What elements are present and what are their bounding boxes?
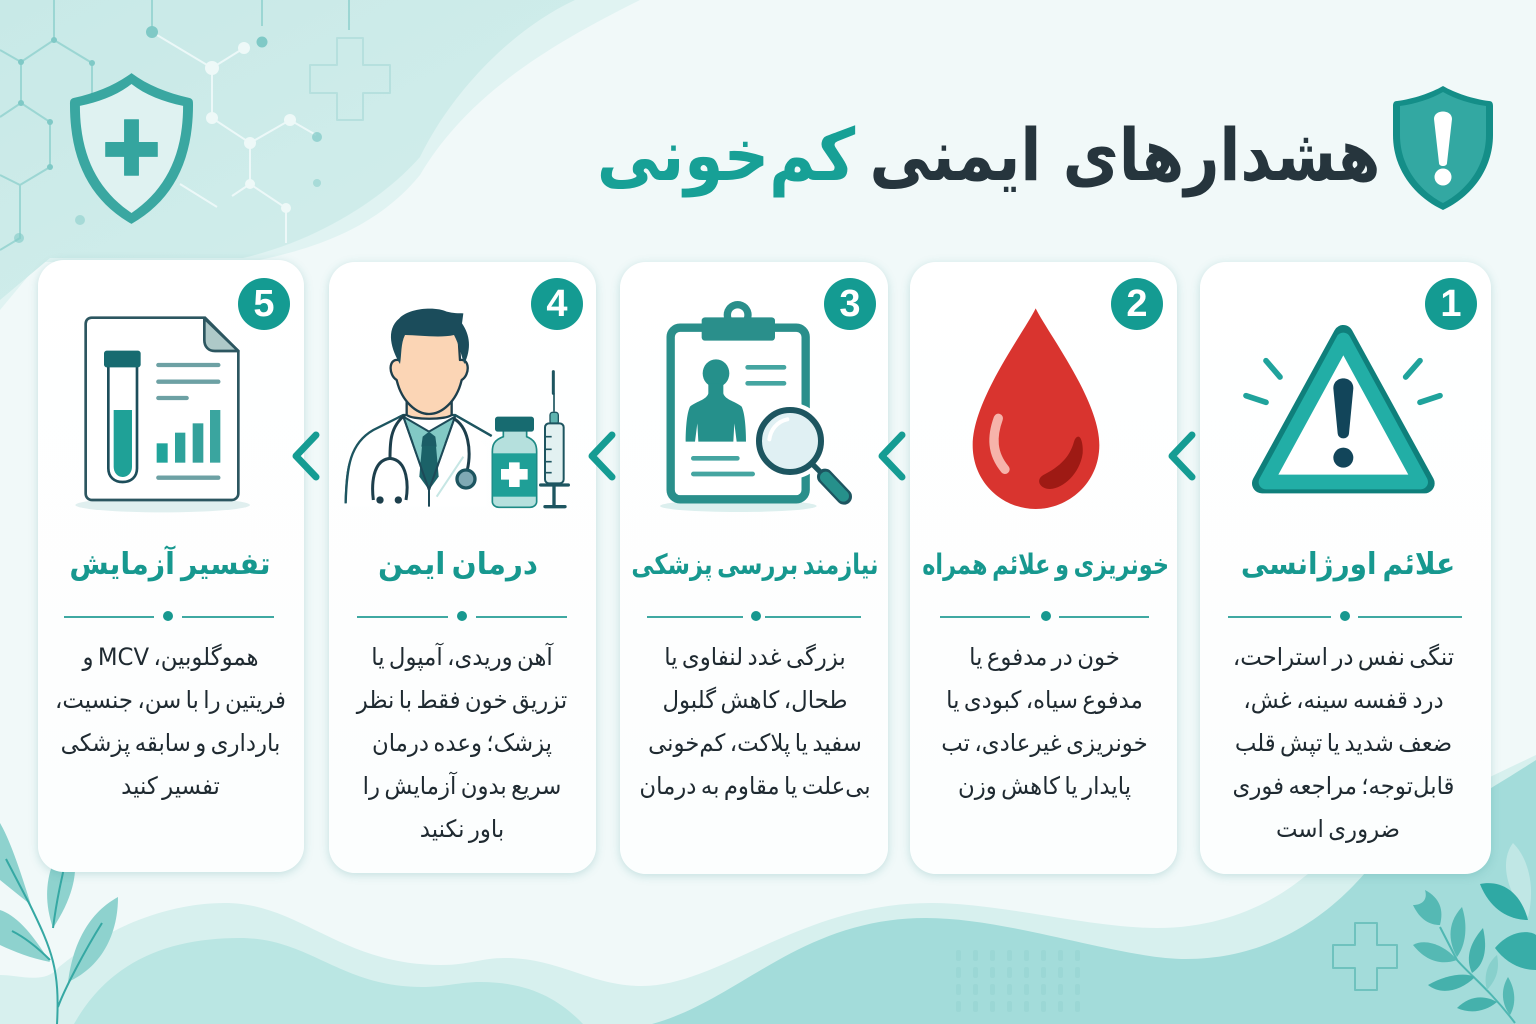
icon: title alert shield (1393, 86, 1493, 210)
body text: تفسیر کنید (121, 772, 220, 800)
body text: هموگلوبین، MCV و (82, 643, 259, 671)
heading: تفسیر آزمایش (69, 547, 271, 582)
body text: خون در مدفوع یا (969, 643, 1120, 671)
divider (357, 611, 567, 621)
body text: فریتین را با سن، جنسیت، (55, 686, 286, 714)
step number 4: 4 (546, 283, 568, 325)
divider (647, 611, 861, 621)
body text (941, 643, 1148, 800)
shield icon top left (70, 73, 193, 224)
body text (55, 643, 286, 800)
body text: پایدار یا کاهش وزن (958, 772, 1131, 800)
body text: ضروری است (1276, 815, 1400, 843)
title (597, 113, 1380, 198)
body text: سریع بدون آزمایش را (363, 772, 561, 800)
body text (1233, 643, 1454, 843)
body text: طحال، کاهش گلبول (662, 686, 848, 714)
body text: بی‌علت یا مقاوم به درمان (639, 772, 871, 800)
molecule lines (0, 0, 349, 250)
divider (940, 611, 1149, 621)
divider (64, 611, 274, 621)
arrow: step 4 to 5 (292, 432, 320, 480)
arrow: step 3 to 4 (588, 432, 616, 480)
title: کم‌خونی (597, 113, 855, 197)
arrow: step 1 to 2 (1168, 432, 1196, 480)
body text (639, 643, 871, 800)
step number 5 (238, 278, 290, 330)
step number 1 (1425, 278, 1477, 330)
body text: بزرگی غدد لنفاوی یا (664, 643, 846, 671)
body text: خونریزی غیرعادی، تب (941, 729, 1148, 757)
body text: قابل‌توجه؛ مراجعه فوری (1233, 772, 1454, 800)
right plant (1413, 843, 1536, 1023)
step number 3 (824, 278, 876, 330)
body text: سفید یا پلاکت، کم‌خونی (648, 729, 862, 757)
icon: lab report (76, 316, 250, 512)
divider (1228, 611, 1462, 621)
heading: نیازمند بررسی پزشکی (631, 548, 878, 581)
body text (356, 642, 567, 843)
step number 4 (531, 278, 583, 330)
icon: doctor with vial and syringe (344, 308, 570, 508)
icon: clipboard with magnifier (660, 301, 852, 512)
lower light wave (0, 755, 1536, 1024)
body text: باور نکنید (420, 815, 504, 843)
body text: ضعف شدید یا تپش قلب (1235, 729, 1452, 757)
step number 3: 3 (839, 283, 861, 325)
panel: step 5 test interpretation (38, 260, 304, 872)
body text: مدفوع سیاه، کبودی یا (946, 686, 1143, 714)
body text: تزریق خون فقط با نظر (357, 686, 567, 714)
body text: درد قفسه سینه، غش، (1243, 686, 1444, 714)
step number 1: 1 (1440, 283, 1462, 325)
panel: step 4 safe treatment (329, 262, 596, 873)
heading: علائم اورژانسی (1241, 547, 1455, 582)
body text: تنگی نفس در استراحت، (1233, 643, 1454, 671)
outline crosses (310, 38, 390, 120)
icon: blood drop (972, 308, 1100, 509)
left plant (0, 823, 118, 1024)
body text: آهن وریدی، آمپول یا (371, 643, 553, 671)
arrow: step 2 to 3 (878, 432, 906, 480)
panel: step 1 emergency signs (1200, 262, 1491, 874)
icon: warning triangle (1243, 325, 1443, 494)
body text: پزشک؛ وعده درمان (372, 729, 552, 757)
step number 2 (1111, 278, 1163, 330)
body text: بارداری و سابقه پزشکی (61, 729, 280, 757)
step number 5: 5 (253, 283, 275, 325)
heading: خونریزی و علائم همراه (922, 548, 1169, 581)
step number 2: 2 (1126, 283, 1148, 325)
title: هشدارهای ایمنی (870, 113, 1380, 197)
panel: step 3 medical evaluation (620, 262, 888, 874)
heading: درمان ایمن (378, 547, 538, 582)
panel: step 2 bleeding (910, 262, 1177, 874)
